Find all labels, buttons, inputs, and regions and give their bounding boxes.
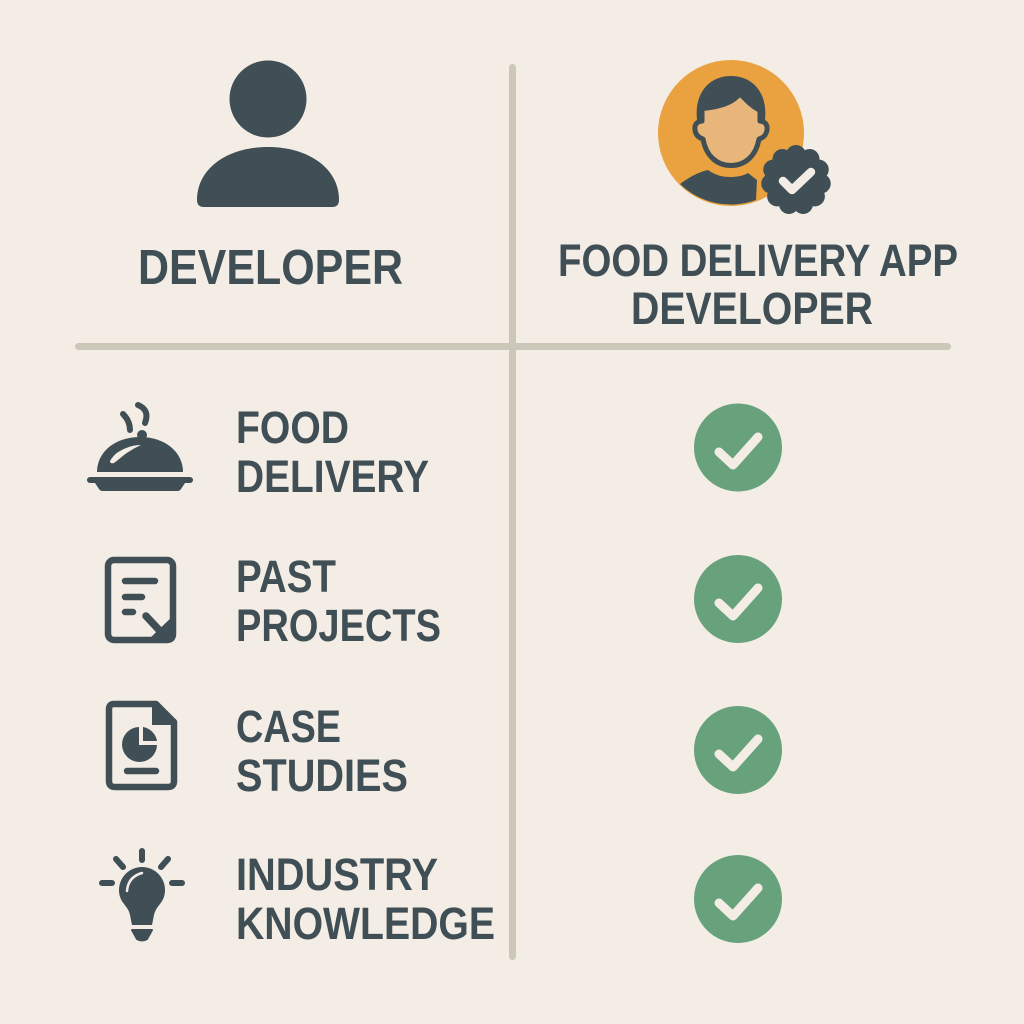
heading: food delivery app developer: DEVELOPER	[631, 283, 873, 334]
label: industry knowledge	[236, 849, 495, 949]
label: past projects: PAST	[236, 551, 336, 602]
icon: food delivery app developer avatar	[658, 60, 832, 216]
check: past projects	[694, 555, 782, 643]
label: food delivery	[236, 402, 429, 502]
label: case studies: CASE	[236, 701, 341, 752]
label: food delivery: FOOD	[236, 402, 349, 453]
row: industry knowledge	[102, 849, 782, 949]
check: case studies	[694, 706, 782, 794]
row: case studies	[109, 701, 782, 801]
icon: verified badge	[760, 145, 832, 216]
heading: developer: DEVELOPER	[138, 241, 403, 295]
label: food delivery: DELIVERY	[236, 451, 429, 502]
row: food delivery	[87, 402, 782, 502]
icon: light bulb	[102, 851, 182, 940]
check: food delivery	[694, 404, 782, 492]
label: past projects	[236, 551, 441, 651]
icon: food cloche	[87, 405, 193, 491]
heading: food delivery app developer	[558, 235, 958, 334]
row: past projects	[108, 551, 782, 651]
icon: report document	[109, 704, 176, 787]
label: past projects: PROJECTS	[236, 600, 441, 651]
label: industry knowledge: INDUSTRY	[236, 849, 438, 900]
label: industry knowledge: KNOWLEDGE	[236, 898, 495, 949]
label: case studies: STUDIES	[236, 750, 408, 801]
icon: developer person	[197, 60, 339, 207]
heading: food delivery app developer: FOOD DELIVERY APP	[558, 235, 958, 286]
check: industry knowledge	[694, 855, 782, 943]
label: case studies	[236, 701, 408, 801]
icon: project document	[108, 560, 176, 643]
